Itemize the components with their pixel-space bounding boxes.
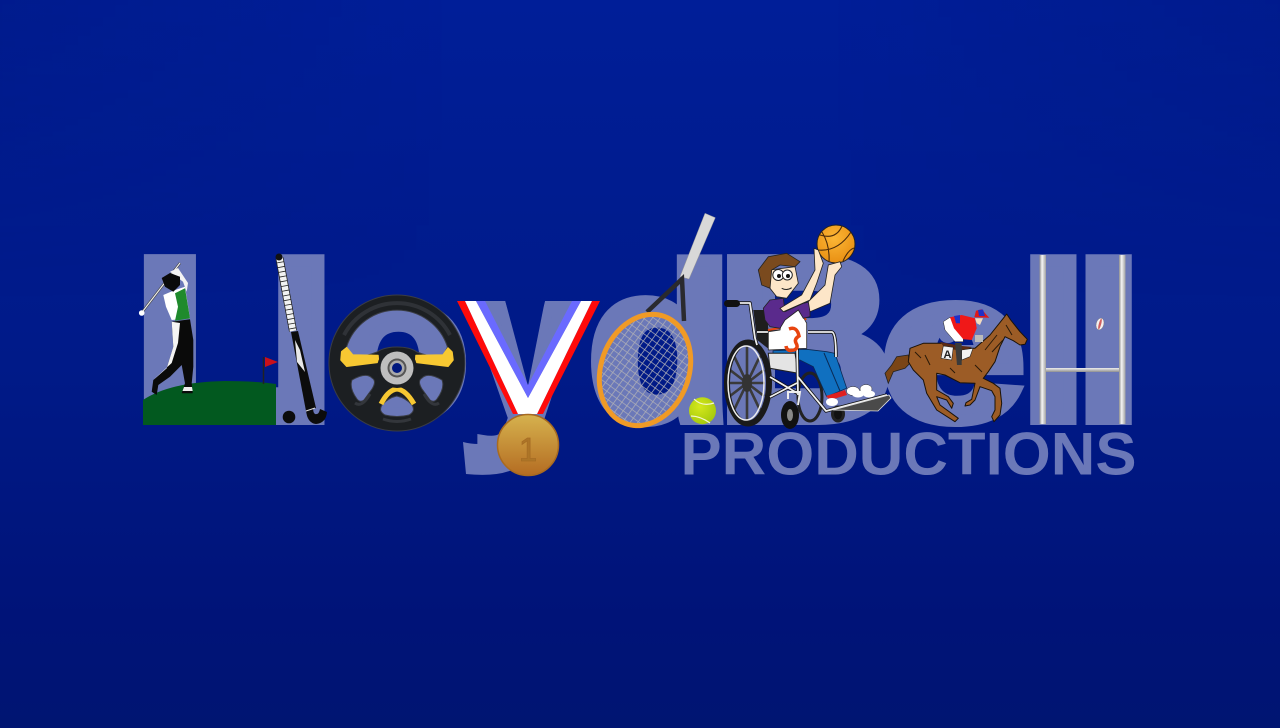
crossbar (1046, 368, 1119, 372)
y descender tail (463, 442, 512, 475)
number one: 1 (519, 431, 537, 468)
icon: rugby goal posts (1040, 255, 1126, 424)
wordmark letters: LloydBell: l (1075, 221, 1142, 466)
sleeves (763, 298, 810, 328)
icon: tennis ball (689, 397, 716, 424)
horse shading (915, 325, 1012, 373)
wordmark letters: LloydBell: y (473, 228, 577, 465)
footplate (833, 395, 891, 411)
icon: racehorse and jockey (885, 309, 1027, 422)
saddle cloth (941, 346, 973, 360)
jersey (768, 308, 807, 350)
icon: boy in wheelchair with basketball (724, 225, 891, 429)
main wheel (727, 342, 769, 424)
icon: golfer on green with flag (139, 263, 278, 425)
green mound (143, 381, 276, 425)
wordmark letters: LloydBell: d (588, 222, 732, 466)
wordmark letters: LloydBell (133, 210, 1142, 468)
gold disc (498, 414, 558, 476)
icon: hockey stick and ball (276, 254, 327, 424)
rim highlight (344, 303, 450, 335)
ribbon (457, 301, 600, 414)
head (758, 253, 800, 298)
yellow grips (341, 348, 453, 404)
icon: medal with ribbon (457, 301, 600, 476)
icon: steering wheel (329, 295, 465, 431)
rugby ball (1095, 317, 1105, 331)
subtitle: PRODUCTIONS: PRODUCTIONS (680, 420, 1136, 488)
throat (647, 279, 684, 321)
horse body, neck, head and legs (908, 314, 1027, 422)
handle grip (724, 300, 740, 307)
wordmark letters: LloydBell: l (268, 221, 335, 466)
golfer figure (139, 263, 193, 395)
y inner notch (505, 300, 545, 386)
caster wheel (781, 392, 800, 429)
saddle (940, 342, 972, 351)
uprights (1040, 255, 1126, 424)
horse tail (885, 355, 910, 383)
far wheel and caster (798, 373, 844, 421)
wordmark letters: LloydBell: B (717, 211, 894, 468)
wordmark letters: LloydBell: o (327, 229, 469, 464)
wordmark letters: LloydBell: e (881, 229, 1025, 464)
wordmark letters: LloydBell: l (1020, 221, 1087, 466)
frame tubes (738, 303, 887, 411)
hub (377, 348, 417, 388)
spoke shading (355, 394, 439, 422)
wheel rim and spokes (329, 295, 465, 431)
seat cushion (768, 353, 798, 373)
flag (264, 357, 278, 384)
icon: tennis racket (584, 213, 715, 439)
jockey (943, 309, 989, 365)
jeans (773, 349, 847, 397)
arms (780, 248, 842, 312)
shoes (826, 384, 875, 406)
basketball (817, 225, 855, 263)
chair back (753, 310, 770, 350)
head and strings (584, 301, 706, 439)
e counter patch (939, 327, 957, 343)
handle (680, 213, 715, 279)
wordmark letters: LloydBell: L (133, 210, 295, 468)
cloth letter: A (944, 349, 952, 361)
